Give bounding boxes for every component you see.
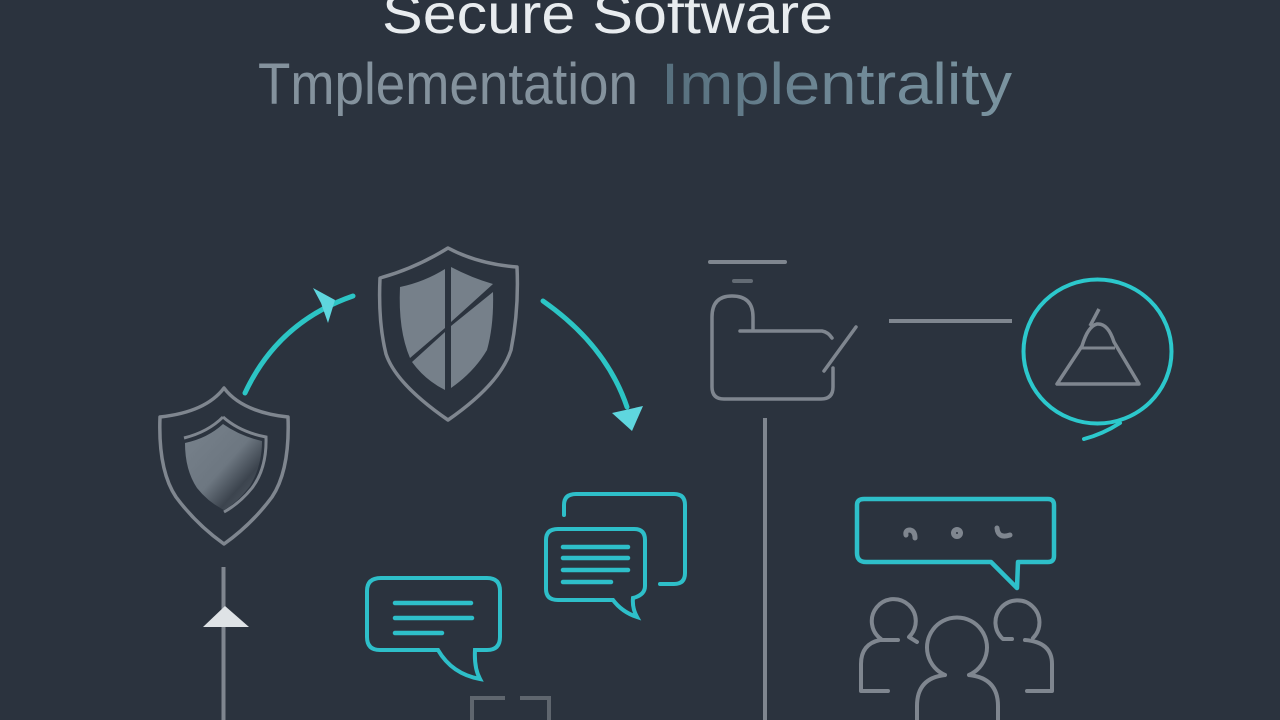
arrow: small shield to large shield [245, 288, 353, 393]
icon: group of three people [861, 599, 1052, 720]
vertical line [222, 567, 226, 720]
front bubble text lines [563, 547, 628, 582]
dot three [997, 528, 1010, 536]
back bubble [564, 494, 685, 584]
subtitle [258, 52, 1012, 117]
frame left corner [472, 698, 505, 720]
shield panel bottom left [412, 332, 445, 390]
main vertical divider [763, 418, 767, 720]
connector line to circle [889, 319, 1012, 323]
arrow curve [245, 296, 353, 393]
triangle marker [203, 606, 249, 627]
large shield outline [380, 248, 517, 420]
subtitle left word: Tmplementation [258, 52, 638, 117]
folder body [712, 296, 833, 399]
icon: chat bubble with text [367, 578, 500, 679]
circle ring [1024, 280, 1172, 424]
arrow: large shield to chat [543, 301, 643, 431]
subtitle right word: Implentrality [661, 52, 1012, 117]
ring tail [1084, 423, 1120, 439]
shield panel bottom right [451, 292, 493, 388]
bubble text lines [395, 603, 472, 633]
person center [917, 618, 998, 720]
connector with upward triangle [203, 567, 249, 720]
speech bubble outline [857, 499, 1054, 588]
arrow head [612, 406, 643, 431]
icon: speech bubble with dots [857, 499, 1054, 588]
icon: small shield [160, 388, 288, 544]
person right [995, 600, 1052, 691]
icon: circled warning cone [1024, 280, 1172, 439]
folder lid [740, 331, 832, 338]
small shield outline [160, 388, 288, 544]
front bubble [546, 529, 645, 617]
dot one [906, 530, 915, 538]
cone band [1080, 346, 1115, 350]
icon: folder with pen [710, 262, 856, 399]
bubble outline [367, 578, 500, 679]
frame right corner [520, 698, 549, 720]
pen stroke [824, 327, 856, 371]
speech dots [906, 528, 1010, 538]
arrow head [313, 288, 335, 323]
dot two [954, 530, 960, 536]
shield panel top left [400, 269, 445, 358]
icon: stacked chat bubbles [546, 494, 685, 617]
shield panel top right [451, 267, 493, 322]
icon: partial frame at bottom [472, 698, 549, 720]
person left [861, 599, 917, 691]
small shield inner outline [184, 417, 266, 512]
arrow curve [543, 301, 627, 407]
top bar [710, 260, 785, 264]
small dash [734, 279, 751, 283]
small shield inner fill [185, 424, 262, 510]
cone triangle [1057, 309, 1139, 384]
icon: large shield [380, 248, 517, 420]
